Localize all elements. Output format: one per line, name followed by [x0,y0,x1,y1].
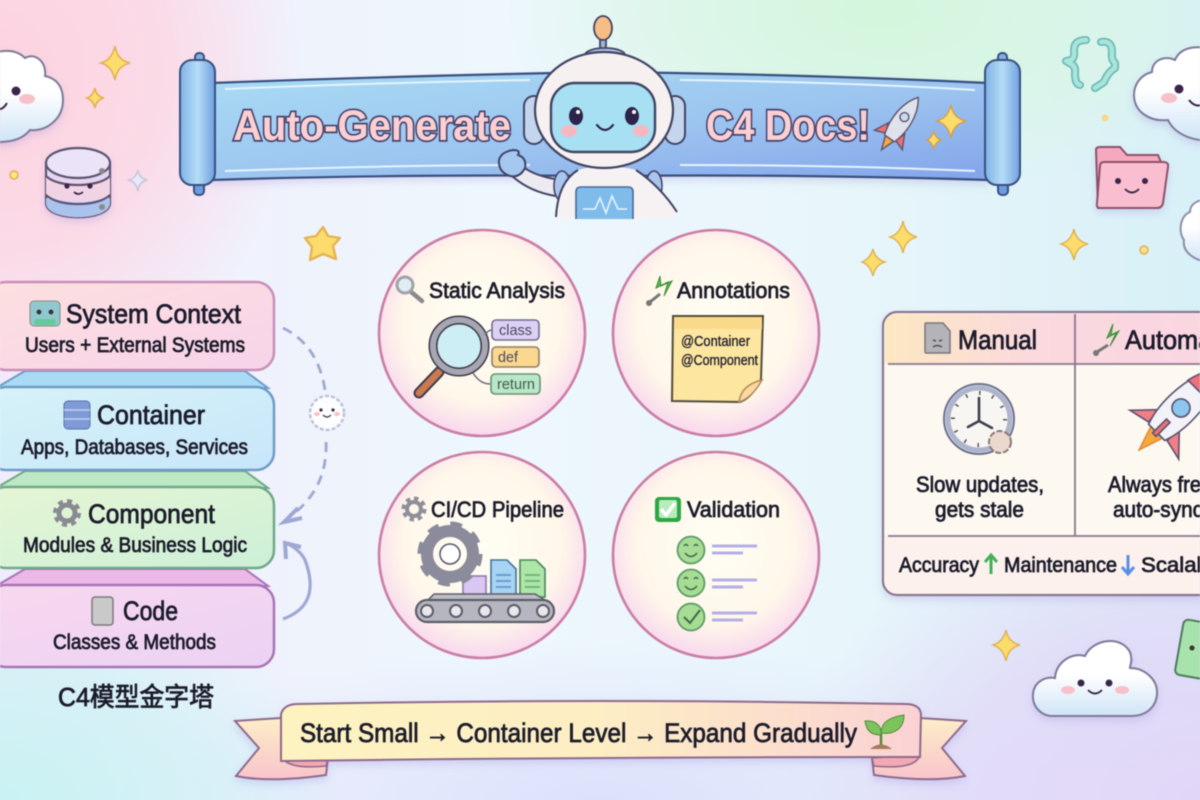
title text left: Auto-Generate [233,102,511,150]
panel: Manual vs Automation table [883,312,1200,595]
robot mascot [499,16,685,219]
green cube icon [1174,619,1200,681]
icon: folder [1096,147,1168,208]
sticky note: @Container [681,334,750,350]
icon: clock [944,384,1014,454]
checklist row 3 [678,604,757,630]
panel: C4 model pyramid [0,282,274,712]
ribbon main band [281,701,921,761]
ribbon: call to action [235,701,966,779]
robot shoulders [554,171,662,201]
heading: Static Analysis [429,278,565,303]
icon: green check [655,497,681,522]
icon: rocket [1115,343,1200,474]
layer: Container: Container [97,400,205,430]
sticky note: @Component [681,353,758,369]
checklist row 2 [678,570,757,596]
tag: return [491,374,540,394]
heading: CI/CD Pipeline [431,497,564,522]
icon: small gear [404,499,424,519]
pyramid caption: C4模型金字塔 [58,682,214,712]
title banner [180,53,1020,195]
icon: small magnifier [397,277,422,301]
panel: Validation [613,452,819,658]
cloud top left [0,51,63,142]
arrow: code up to component [283,543,310,619]
text: slow updates: gets stale [935,497,1024,522]
heading: Validation [687,497,780,522]
ribbon right tail [872,718,966,779]
table rules [888,314,1200,536]
panel: Annotations [613,230,819,436]
tag: class: class [499,322,532,339]
sparkle stars upper right [862,114,1148,276]
text: slow updates [916,472,1044,522]
title text right: C4 Docs! [706,102,870,150]
heading: Annotations [677,278,790,303]
heading: Manual: Manual [958,325,1037,355]
tag: def [492,347,539,367]
ribbon fold shading [281,755,920,767]
banner band [212,72,988,180]
icon: lightning wand [646,276,672,306]
layer: Component: Modules & Business Logic [23,534,247,557]
robot chest screen [576,187,633,219]
robot antenna [585,16,625,62]
robot body [556,166,677,219]
pipeline documents [463,560,545,598]
magnifier illustration [419,320,485,393]
tag: return: return [497,376,535,393]
cloud right edge [1181,200,1200,262]
layer: Code: Code [123,596,178,626]
icon: small rocket [868,88,932,160]
cloud top right [1134,47,1200,140]
table header [885,314,1200,364]
layer: Container: Apps, Databases, Services [21,436,248,459]
icon: sprout [865,715,904,749]
table footer [885,536,1200,593]
layer: Container [0,387,274,470]
tag: def: def [498,349,519,366]
big star [305,227,340,260]
right scroll roller [985,53,1020,195]
layer: Code: Classes & Methods [53,631,216,654]
sticky note [672,316,763,402]
metrics row: Maintenance [1004,554,1117,577]
left scroll roller [180,53,215,195]
robot face [561,107,649,137]
layer: Component: Component [88,499,215,529]
text: slow updates: Slow updates, [916,472,1044,497]
layer: System Context: System Context [66,299,241,329]
layer: Code [0,585,274,667]
banner highlights [225,80,975,171]
panel: CI/CD Pipeline [379,452,585,658]
metrics row: Accuracy [899,554,979,577]
robot arm and hand [499,150,560,196]
layer: System Context [0,282,274,370]
robot head [535,52,673,168]
icon: database [46,148,110,217]
panel: Static Analysis [379,230,585,436]
stack connector trapezoids [0,371,268,586]
ribbon left tail [235,718,328,779]
layer: Component [0,487,274,568]
icon: lightning wand [1093,324,1119,356]
checklist row 1 [678,536,757,564]
sparkle lower right [993,630,1020,661]
arrow: dashed flow to component [283,328,326,522]
big gear [422,526,478,582]
conveyor belt [416,594,554,622]
layer: System Context: Users + External Systems [25,334,245,357]
curly braces icon [1066,40,1115,88]
pale sparkle [129,170,147,191]
tag: class [492,320,539,340]
small fluffy cloud mascot [310,396,344,430]
table card [883,312,1200,595]
ribbon text: Start Small → Container Level → Expand Gradually [300,718,857,748]
sparkles on banner [927,105,966,149]
connectors [473,330,492,384]
cloud lower right [1033,641,1157,716]
text: always fresh [1108,472,1200,522]
sparkle stars top left [10,46,130,179]
robot face screen [551,83,655,152]
metrics row [899,554,1200,577]
robot ears [524,96,685,144]
robot body outline [556,170,677,217]
icon: sad document [925,323,950,353]
